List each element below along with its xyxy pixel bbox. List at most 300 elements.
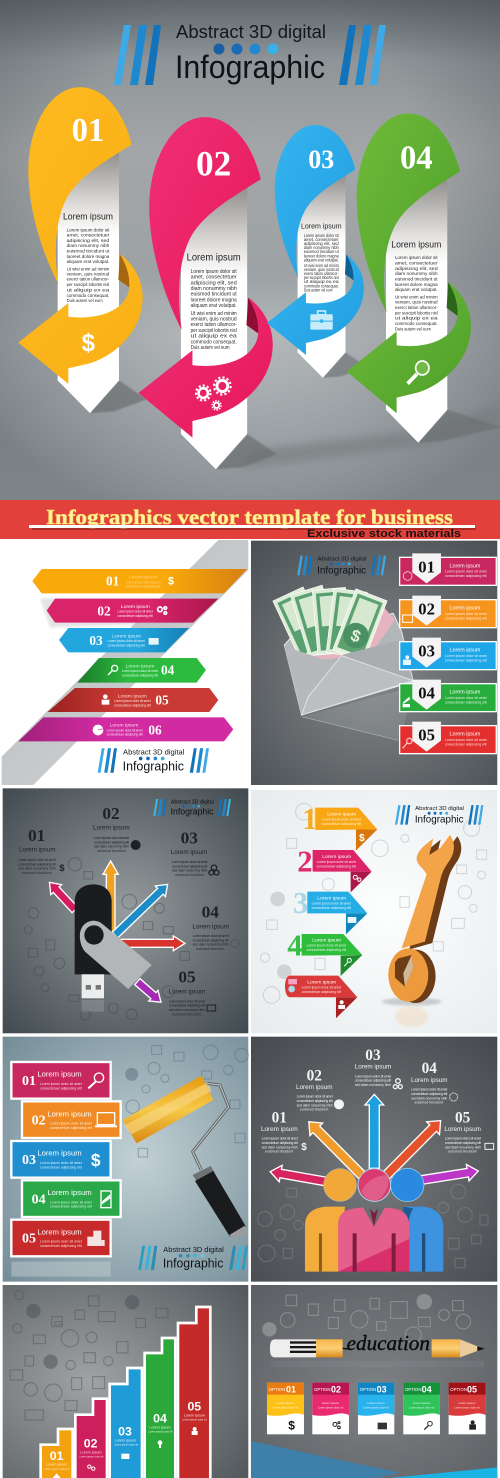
arrow 01: $ xyxy=(168,576,174,588)
panel: rising bars chart xyxy=(3,1285,248,1478)
text block 05: consectetuer adipiscing elit xyxy=(445,1141,481,1145)
bar 02 xyxy=(74,1397,108,1478)
card 04: 04 xyxy=(32,1193,46,1208)
ribbon 03: blue: Ut wisi enim ad minim xyxy=(304,263,339,268)
text block 01: sed diam nonummy nibh xyxy=(262,1145,298,1149)
logo: Abstract 3D digital xyxy=(123,747,185,756)
ribbon 04: green xyxy=(347,113,500,443)
card 01: Lorem ipsum xyxy=(37,1070,82,1079)
ribbon 04: green: diam nonummy nibh xyxy=(395,271,438,277)
option card 01 xyxy=(267,1383,304,1434)
text block 02: sed diam nonummy nibh xyxy=(297,1103,333,1107)
decorative blue wedges xyxy=(251,1441,497,1478)
bar 04 xyxy=(143,1337,177,1478)
card 03 xyxy=(11,1141,111,1178)
logo: Abstract 3D digital xyxy=(415,806,464,812)
logo: abstract 3D digital infographic: Abstract 3D digital xyxy=(176,22,326,42)
text block 04 xyxy=(411,1060,458,1105)
illustration: USB drive xyxy=(75,884,152,1012)
text block 03: Lorem ipsum dolor sit amet xyxy=(172,860,207,864)
logo: Infographic xyxy=(317,565,366,576)
bar 04: Lorem ipsum dolor sit xyxy=(148,1430,173,1434)
illustration: education pencil xyxy=(270,1333,485,1367)
ribbon 2: Lorem ipsum dolor sit amet xyxy=(317,860,356,864)
text block 05: sed diam nonummy nibh xyxy=(169,1008,205,1012)
ribbon 02: pink: Lorem ipsum dolor sit xyxy=(191,269,237,275)
card 02 xyxy=(22,1101,121,1138)
ribbon 01: yellow: ut aliquip ex ea xyxy=(67,287,110,293)
text block 04: consectetuer adipiscing elit xyxy=(411,1092,447,1096)
ribbon 01: yellow: diam nonummy nibh xyxy=(67,243,110,249)
ribbon 02: pink: Ut wisi enim ad minim xyxy=(191,311,237,317)
text block 04: euismod tincidunt xyxy=(415,1101,443,1105)
background icons xyxy=(263,1294,471,1343)
panel: USB drive with arrows xyxy=(3,788,248,1033)
card 01: 01 xyxy=(418,557,435,576)
ribbon 02: pink: diam nonummy nibh xyxy=(191,286,237,292)
card 02 xyxy=(400,596,496,628)
banner: title strip: Exclusive stock materials xyxy=(307,528,461,540)
arrow 01: 01 xyxy=(106,574,119,589)
bar 01: Lorem ipsum dolor sit xyxy=(44,1467,69,1471)
card 03: 03 xyxy=(418,642,435,661)
arrow 02: consectetuer adipiscing elit xyxy=(117,614,153,618)
ribbon 3: Lorem ipsum dolor sit amet xyxy=(312,902,351,906)
ribbon 01: yellow: 01 xyxy=(72,112,104,149)
card 03: 03 xyxy=(22,1153,36,1168)
bar 04: 04 xyxy=(153,1412,167,1426)
panel: main 3D ribbons infographic xyxy=(0,0,500,500)
ribbon 5: consectetuer adipiscing elit xyxy=(302,990,341,994)
text block 01: sed diam nonummy nibh xyxy=(18,867,56,871)
card 04: Lorem ipsum dolor sit amet xyxy=(50,1200,92,1204)
text block 03: sed diam nonummy nibh xyxy=(355,1083,391,1087)
ribbon 03: blue: commodo consequat. xyxy=(304,283,339,289)
text block 02: Lorem ipsum xyxy=(93,825,130,832)
text block 03 xyxy=(355,1047,402,1089)
text block 03: euismod tincidunt xyxy=(175,873,204,877)
bar 01: Lorem ipsum xyxy=(46,1463,67,1467)
text block 03: Lorem ipsum xyxy=(171,849,207,856)
card 03: consectetuer adipiscing elit xyxy=(445,658,487,662)
ribbon 2: Lorem ipsum xyxy=(322,854,351,860)
illustration: envelope and banknotes: $ xyxy=(348,626,364,647)
ribbon 03: blue: adipiscing elit, sed xyxy=(304,241,339,246)
arrow 02 xyxy=(302,1115,370,1183)
card 03: Lorem ipsum dolor sit amet xyxy=(445,654,487,658)
ribbon 5 xyxy=(285,976,357,1018)
text block 01: Lorem ipsum dolor sit amet xyxy=(18,858,56,862)
option card 01: 01 xyxy=(286,1385,296,1395)
ribbon 02: pink: commodo consequat. xyxy=(191,340,237,346)
text block 03: consectetuer adipiscing elit xyxy=(355,1079,391,1083)
text block 02: consectetuer adipiscing elit xyxy=(297,1099,333,1103)
card 04: consectetuer adipiscing elit xyxy=(445,700,487,704)
panel: three people with arrows xyxy=(251,1037,497,1282)
text block 02: 02 xyxy=(307,1068,322,1085)
ribbon 03: blue: veniam, quis nostrud xyxy=(304,267,339,272)
option card 04: Lorem ipsum xyxy=(413,1401,431,1405)
text block 04: sed diam nonummy nibh xyxy=(411,1096,447,1100)
arrow 04 xyxy=(77,658,206,683)
option card 03: OPTION xyxy=(360,1387,376,1392)
card 01 xyxy=(11,1062,111,1099)
arrow 04: consectetuer adipiscing elit xyxy=(122,673,158,677)
arrow 05: 05 xyxy=(155,693,169,708)
arrow 06: 06 xyxy=(148,722,162,737)
ribbon 02: pink: ut aliquip ex ea xyxy=(191,334,237,340)
ribbon 02: pink: 02 xyxy=(196,143,231,184)
arrow 04 xyxy=(120,936,185,951)
ribbon 5: Lorem ipsum dolor sit amet xyxy=(302,986,341,990)
background icons xyxy=(258,1184,488,1268)
text block 02 xyxy=(93,804,141,853)
ribbon 01: yellow: laoreet dolore magna xyxy=(67,254,110,260)
ribbon 03: blue: euismod tincidunt ut xyxy=(304,249,339,254)
card 01: 01 xyxy=(22,1074,36,1089)
ribbon 04: green: Lorem ipsum xyxy=(391,239,441,249)
bar 02: Lorem ipsum dolor sit xyxy=(79,1455,104,1459)
text block 05: euismod tincidunt xyxy=(448,1150,477,1154)
ribbon 03: blue: laoreet dolore magna xyxy=(304,253,339,258)
logo: abstract 3D digital infographic: Infographic xyxy=(175,49,325,85)
text block 03 xyxy=(171,828,219,877)
illustration: education pencil: education xyxy=(347,1333,430,1355)
panel: wrench with ribbons xyxy=(251,790,497,1033)
text block 04: euismod tincidunt xyxy=(196,947,224,951)
ribbon 1: 1 xyxy=(302,802,318,836)
text block 04: Lorem ipsum dolor sit amet xyxy=(193,934,229,938)
card 02: 02 xyxy=(418,600,435,619)
option card 01: Lorem ipsum dolor sit xyxy=(273,1406,298,1410)
arrow 04 xyxy=(379,1114,447,1183)
text block 02: consectetuer adipiscing elit xyxy=(94,840,129,844)
arrow 01 xyxy=(32,569,247,593)
text block 02: sed diam nonummy nibh xyxy=(94,845,129,849)
text block 05: 05 xyxy=(455,1109,471,1126)
text block 01: Lorem ipsum dolor sit amet xyxy=(262,1137,298,1141)
option card 05: 05 xyxy=(467,1385,477,1395)
ribbon 01: yellow: Lorem ipsum dolor sit xyxy=(67,227,110,233)
card 02: Lorem ipsum xyxy=(450,606,481,612)
arrow 01 xyxy=(44,877,80,915)
ribbon 02: pink: adipiscing elit, sed xyxy=(191,280,237,287)
bar 05: 05 xyxy=(187,1400,201,1414)
text block 04: 04 xyxy=(202,902,219,921)
text block 01: 01 xyxy=(272,1109,287,1126)
bar 05 xyxy=(177,1306,212,1478)
bar 02: Lorem ipsum xyxy=(80,1450,102,1454)
ribbon 03: blue: aliquam erat volutpat. xyxy=(304,257,339,262)
bar 03: Lorem ipsum xyxy=(115,1438,136,1442)
card 05: consectetuer adipiscing elit xyxy=(40,1244,82,1248)
icon: magnifier xyxy=(408,361,429,384)
logo: Abstract 3D digital xyxy=(171,799,214,805)
card 04 xyxy=(22,1180,121,1217)
illustration: envelope and banknotes xyxy=(273,585,413,741)
ribbon 01: yellow: amet, consectetuer xyxy=(67,232,110,239)
ribbon 04: green: commodo consequat. xyxy=(395,321,438,327)
text block 05: 05 xyxy=(178,967,196,986)
option card 04: 04 xyxy=(422,1385,432,1395)
arrow 04: 04 xyxy=(161,663,175,678)
ribbon 01: yellow: Lorem ipsum xyxy=(63,212,113,222)
logo xyxy=(297,556,386,576)
ribbon 2: 2 xyxy=(297,844,313,878)
icon: dollar sign: $ xyxy=(82,330,95,357)
bar 03: Lorem ipsum dolor sit xyxy=(114,1443,138,1447)
ribbon 3: 3 xyxy=(293,886,308,920)
text block 03: Lorem ipsum xyxy=(355,1064,391,1071)
card 05 xyxy=(11,1220,111,1256)
ribbon 3: Lorem ipsum xyxy=(317,896,346,902)
card 03: $ xyxy=(91,1150,101,1170)
ribbon 04: green: ut aliquip ex ea xyxy=(395,316,438,322)
text block 01: $ xyxy=(59,863,65,873)
option card 01: OPTION xyxy=(269,1387,285,1392)
ribbon 4: Lorem ipsum xyxy=(312,938,341,944)
option card 03: Lorem ipsum xyxy=(367,1401,385,1405)
card 02: consectetuer adipiscing elit xyxy=(445,616,487,620)
ribbon 03: blue: Lorem ipsum xyxy=(301,222,342,230)
bar 03 xyxy=(108,1367,143,1478)
ribbon 1: Lorem ipsum xyxy=(327,812,356,818)
card 01: Lorem ipsum dolor sit amet xyxy=(445,570,487,574)
card 01: Lorem ipsum xyxy=(450,563,481,569)
ribbon 04: green: aliquam erat volutpat. xyxy=(395,287,438,293)
ribbon 04: green: exerci tation ullamcor- xyxy=(395,305,438,311)
ribbon 3: consectetuer adipiscing elit xyxy=(312,906,351,910)
ribbon 04: green: amet, consectetuer xyxy=(395,260,438,266)
arrow 06: Lorem ipsum dolor sit amet xyxy=(107,728,143,732)
ribbon 04: green: Duis autem vel eum xyxy=(395,326,431,332)
card 03: consectetuer adipiscing elit xyxy=(40,1165,82,1169)
arrow 01: Lorem ipsum xyxy=(129,575,158,581)
ribbon 03: blue: per suscipit lobortis nisl xyxy=(304,275,339,280)
ribbon 01: yellow: adipiscing elit, sed xyxy=(67,238,110,244)
card 02: Lorem ipsum xyxy=(47,1109,92,1118)
text block 05: Lorem ipsum dolor sit amet xyxy=(445,1137,481,1141)
text block 05: Lorem ipsum xyxy=(444,1126,481,1133)
card 04: Lorem ipsum xyxy=(47,1188,92,1197)
ribbon 02: pink: veniam, quis nostrud xyxy=(191,316,237,323)
bar 05: Lorem ipsum dolor sit xyxy=(182,1418,207,1422)
logo xyxy=(138,1245,248,1271)
option card 05: Lorem ipsum dolor sit xyxy=(454,1406,480,1410)
ribbon 3 xyxy=(293,886,367,934)
logo: Infographic xyxy=(171,806,214,816)
arrow 06 xyxy=(18,717,233,741)
arrow 05 xyxy=(420,1163,480,1188)
ribbon 1 xyxy=(302,802,377,851)
card 01 xyxy=(400,553,496,585)
ribbon 01: yellow: Duis autem vel eum xyxy=(67,298,103,304)
arrow 05: consectetuer adipiscing elit xyxy=(114,703,151,707)
text block 01: euismod tincidunt xyxy=(22,871,52,875)
arrow 03 xyxy=(365,1094,384,1168)
arrow 03: 03 xyxy=(89,633,103,648)
arrow 03: Lorem ipsum dolor sit amet xyxy=(107,639,145,643)
text block 01: 01 xyxy=(28,826,45,845)
option card 05: OPTION xyxy=(450,1387,467,1392)
card 01: consectetuer adipiscing elit xyxy=(40,1086,82,1090)
bar 01: 01 xyxy=(50,1449,64,1463)
ribbon 01: yellow: Ut wisi enim ad minim xyxy=(67,266,109,272)
ribbon 4: 4 xyxy=(287,928,303,962)
arrow 05 xyxy=(48,688,218,712)
text block 05: sed diam nonummy nibh xyxy=(445,1145,481,1149)
ribbon 01: yellow xyxy=(18,87,147,413)
arrow 05: Lorem ipsum xyxy=(118,693,147,699)
illustration: three people xyxy=(305,1168,443,1272)
text block 05: euismod tincidunt xyxy=(172,1012,201,1016)
arrow 01 xyxy=(269,1163,328,1190)
background icons xyxy=(10,1290,168,1420)
text block 05: Lorem ipsum dolor sit amet xyxy=(169,999,205,1003)
arrow 02: Lorem ipsum xyxy=(121,604,150,610)
arrow 04: Lorem ipsum dolor sit amet xyxy=(122,669,158,673)
card 05: 05 xyxy=(22,1232,36,1247)
text block 04 xyxy=(192,902,229,951)
ribbon 4: consectetuer adipiscing elit xyxy=(307,948,346,952)
logo: Infographic xyxy=(163,1256,224,1271)
card 02: consectetuer adipiscing elit xyxy=(50,1126,92,1130)
text block 05 xyxy=(169,967,216,1016)
ribbon 04: green: adipiscing elit, sed xyxy=(395,266,438,272)
text block 03: sed diam nonummy nibh xyxy=(172,869,207,873)
background icons xyxy=(126,1045,248,1157)
logo: abstract 3D digital infographic xyxy=(114,22,386,85)
ribbon 02: pink: Duis autem vel eum xyxy=(191,345,230,351)
ribbon 02: pink: Lorem ipsum xyxy=(187,252,241,263)
option card 05 xyxy=(449,1383,486,1434)
option card 02: 02 xyxy=(331,1385,341,1395)
ribbon 1: Lorem ipsum dolor sit amet xyxy=(322,818,361,822)
arrow 02: Lorem ipsum dolor sit amet xyxy=(117,610,153,614)
text block 02 xyxy=(296,1068,344,1112)
option card 03 xyxy=(358,1383,394,1434)
arrow 04: Lorem ipsum xyxy=(126,663,154,669)
ribbon 4 xyxy=(287,928,362,976)
ribbon 04: green: laoreet dolore magna xyxy=(395,282,438,288)
text block 05: Lorem ipsum xyxy=(169,988,205,995)
ribbon 04: green: per suscipit lobortis nisl xyxy=(395,310,438,316)
illustration: paint roller xyxy=(123,1076,247,1239)
card 05 xyxy=(400,722,496,754)
text block 01: euismod tincidunt xyxy=(265,1150,293,1154)
card 01: consectetuer adipiscing elit xyxy=(445,574,487,578)
text block 04: 04 xyxy=(422,1060,437,1077)
option card 04 xyxy=(403,1383,440,1434)
card 04: Lorem ipsum xyxy=(450,690,481,696)
ribbon 04: green: Lorem ipsum dolor sit xyxy=(395,255,438,261)
ribbon 03: blue: ut aliquip ex ea xyxy=(304,279,340,284)
arrow 03 xyxy=(110,879,173,940)
ribbon 4: Lorem ipsum dolor sit amet xyxy=(307,944,346,948)
card 05: Lorem ipsum dolor sit amet xyxy=(40,1240,82,1244)
option card 01: Lorem ipsum xyxy=(277,1401,294,1405)
arrow 06: consectetuer adipiscing elit xyxy=(107,733,143,737)
card 03: Lorem ipsum xyxy=(37,1149,82,1158)
text block 03: 03 xyxy=(181,828,198,847)
arrow 02: 02 xyxy=(97,603,111,618)
background icons xyxy=(260,803,487,1003)
bar 05: Lorem ipsum xyxy=(184,1413,205,1417)
card 02: Lorem ipsum dolor sit amet xyxy=(445,612,487,616)
ribbon 04: green: euismod tincidunt ut xyxy=(395,276,438,282)
text block 02: Lorem ipsum xyxy=(296,1084,333,1091)
ribbon 03: blue xyxy=(267,125,367,378)
arrow 01: Lorem ipsum dolor sit amet xyxy=(126,580,161,584)
arrow 06: Lorem ipsum xyxy=(110,723,138,729)
ribbon 02: pink: euismod tincidunt ut xyxy=(191,292,237,298)
logo: Abstract 3D digital xyxy=(163,1245,224,1254)
text block 03: consectetuer adipiscing elit xyxy=(172,864,207,868)
text block 02: Lorem ipsum dolor sit amet xyxy=(297,1095,333,1099)
text block 02: 02 xyxy=(102,804,120,823)
ribbon 1: consectetuer adipiscing elit xyxy=(322,822,361,826)
icon: briefcase xyxy=(310,311,333,330)
ribbon 2 xyxy=(297,844,372,892)
text block 03: Lorem ipsum dolor sit amet xyxy=(355,1074,391,1078)
text block 04: Lorem ipsum xyxy=(411,1077,448,1084)
ribbon 01: yellow: euismod tincidunt ut xyxy=(67,248,110,254)
text block 04: Lorem ipsum xyxy=(192,923,229,930)
card 05: consectetuer adipiscing elit xyxy=(445,742,487,746)
arrow 03: consectetuer adipiscing elit xyxy=(107,643,145,647)
text block 03: 03 xyxy=(365,1047,381,1064)
card 05: Lorem ipsum xyxy=(37,1227,82,1236)
panel: envelope with money xyxy=(251,541,497,785)
card 04: 04 xyxy=(418,684,436,703)
text block 01 xyxy=(261,1109,307,1154)
option card 01: $ xyxy=(288,1419,295,1433)
text block 05 xyxy=(444,1109,494,1154)
arrow 01: consectetuer adipiscing elit xyxy=(126,585,161,589)
option card 04: OPTION xyxy=(405,1387,422,1392)
text block 01: Lorem ipsum xyxy=(19,846,56,853)
text block 04: sed diam nonummy nibh xyxy=(193,943,229,947)
ribbon 01: yellow: commodo consequat. xyxy=(67,293,109,299)
text block 01: consectetuer adipiscing elit xyxy=(18,862,56,866)
ribbon 02: pink: amet, consectetuer xyxy=(191,274,237,281)
arrow 05: Lorem ipsum dolor sit amet xyxy=(114,699,151,703)
card 04 xyxy=(400,680,496,712)
card 03 xyxy=(400,638,496,670)
ribbon 1: $ xyxy=(359,833,365,844)
logo: Infographic xyxy=(415,815,464,826)
text block 05: consectetuer adipiscing elit xyxy=(169,1004,205,1008)
logo xyxy=(98,747,209,773)
text block 02: euismod tincidunt xyxy=(97,849,126,853)
ribbon 03: blue: exerci tation ullamcor- xyxy=(304,271,339,276)
ribbon 03: blue: Duis autem vel eum xyxy=(304,287,333,293)
card 05: Lorem ipsum dolor sit amet xyxy=(445,738,487,742)
card 02: Lorem ipsum dolor sit amet xyxy=(50,1122,92,1126)
option card 04: Lorem ipsum dolor sit xyxy=(409,1406,435,1410)
icon: gears xyxy=(196,377,231,410)
panel: paint roller with cards xyxy=(3,1037,248,1282)
card 03: Lorem ipsum dolor sit amet xyxy=(40,1161,82,1165)
ribbon 04: green: 04 xyxy=(400,139,433,177)
card 05: Lorem ipsum xyxy=(450,732,481,738)
banner: title strip xyxy=(0,500,500,540)
illustration: wrench xyxy=(382,835,461,1027)
logo xyxy=(153,799,231,816)
ribbon 02: pink: exerci tation ullamcor- xyxy=(191,322,237,328)
bar 03: 03 xyxy=(118,1425,132,1439)
ribbon 04: green: Ut wisi enim ad minim xyxy=(395,294,438,300)
